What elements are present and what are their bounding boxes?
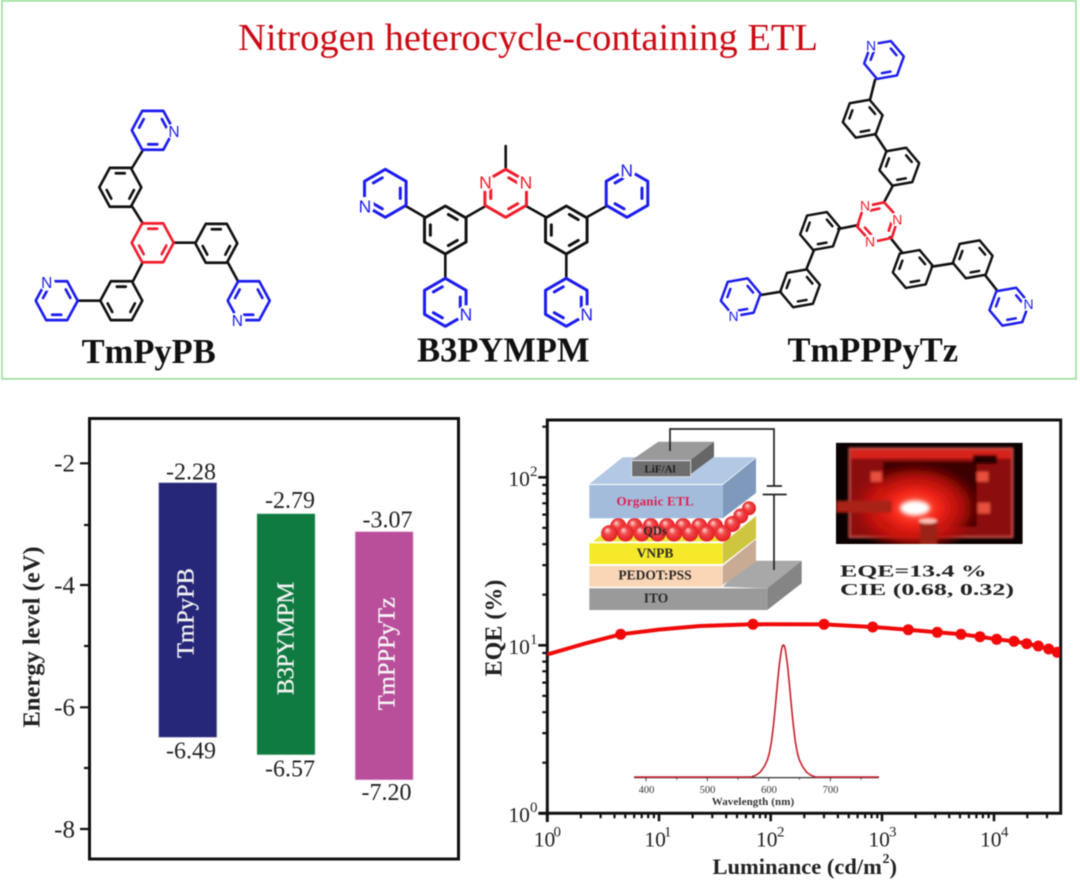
x axis tick labels: 10: [868, 828, 890, 852]
y axis tick labels: -8: [54, 816, 75, 844]
x axis tick labels: 1: [664, 825, 672, 841]
circuit wire and battery: [670, 429, 787, 570]
x axis title: 2: [882, 852, 890, 867]
molecule: B3PYMPM: N: [460, 305, 472, 325]
title: Nitrogen heterocycle-containing ETL: [238, 17, 818, 59]
label: TmPPPyTz: TmPPPyTz: [788, 332, 958, 370]
energy value labels: -6.57: [265, 757, 315, 783]
energy value labels: -3.07: [362, 508, 412, 534]
layer: PEDOT:PSS: [589, 539, 756, 587]
molecule: TmPPPyTz: N: [866, 38, 876, 54]
x axis tick labels: 10: [534, 828, 555, 852]
x axis tick labels: 4: [1001, 825, 1009, 841]
bar: B3PYMPM: [257, 514, 315, 755]
inset: electroluminescence spectrum: [634, 645, 879, 808]
x axis title: Luminance (cd/m: [712, 854, 882, 879]
bar: TmPyPB: TmPyPB: [172, 568, 200, 658]
y axis tick labels: 10: [508, 803, 530, 827]
x axis title: ): [890, 854, 897, 879]
chart: EQE versus luminance: [482, 420, 1063, 879]
molecule: B3PYMPM: N: [580, 305, 593, 325]
molecule: B3PYMPM: N: [359, 196, 371, 216]
bar: TmPPPyTz: TmPPPyTz: [373, 597, 400, 710]
molecule: B3PYMPM: N: [520, 172, 532, 192]
electrode: LiF/Al: [632, 442, 714, 477]
molecule: TmPPPyTz: [714, 33, 1036, 370]
layer: PEDOT:PSS: PEDOT:PSS: [618, 568, 692, 582]
y axis title: EQE (%): [482, 580, 508, 676]
label: B3PYMPM: B3PYMPM: [417, 332, 590, 370]
panel: nitrogen heterocycle ETL molecules: [2, 1, 1076, 379]
layer: VNPB: [589, 516, 756, 564]
molecule: B3PYMPM: N: [479, 172, 492, 192]
x axis tick labels: [534, 825, 1009, 852]
y axis tick labels: 2: [530, 464, 538, 480]
layer: ITO: [589, 561, 802, 610]
x axis tick labels: 10: [980, 828, 1002, 852]
photo: glowing red device: [836, 443, 1023, 554]
electrode: LiF/Al: LiF/Al: [644, 464, 676, 476]
quantum dots layer: [601, 501, 756, 542]
bar: TmPyPB: [158, 482, 217, 738]
x axis tick labels: 2: [777, 825, 784, 841]
energy value labels: -2.28: [166, 459, 216, 485]
x axis tick labels: 0: [554, 825, 561, 841]
callout: device performance: [840, 562, 1014, 599]
y axis tick labels: [54, 450, 75, 844]
label: TmPyPB: TmPyPB: [82, 333, 216, 371]
y axis tick labels: 10: [508, 635, 530, 659]
y axis tick labels: 10: [508, 467, 530, 491]
label: QDs: QDs: [643, 524, 667, 538]
y axis tick labels: -2: [54, 450, 75, 478]
y axis tick labels: 0: [530, 800, 538, 816]
inset: electroluminescence spectrum: 500: [700, 785, 715, 796]
y axis tick labels: -6: [54, 694, 75, 722]
molecule: TmPyPB: [30, 101, 275, 371]
diagram: device structure: [589, 429, 802, 610]
inset: electroluminescence spectrum: 700: [823, 785, 838, 796]
callout: device performance: EQE=13.4 %: [840, 562, 987, 581]
molecule: TmPPPyTz: N: [865, 234, 875, 250]
inset: electroluminescence spectrum: Wavelength (nm): [712, 796, 795, 808]
molecule: TmPyPB: N: [232, 313, 243, 330]
inset: electroluminescence spectrum: 400: [639, 785, 654, 796]
molecule: B3PYMPM: [356, 146, 648, 370]
callout: device performance: CIE (0.68, 0.32): [840, 580, 1014, 599]
inset: electroluminescence spectrum: 600: [761, 785, 777, 796]
y axis tick labels: 1: [530, 632, 538, 648]
layer: organic ETL: [589, 457, 756, 518]
molecule: TmPPPyTz: N: [1023, 296, 1034, 312]
molecule: TmPPPyTz: N: [860, 198, 870, 214]
layer: ITO: ITO: [644, 590, 668, 606]
bar: TmPPPyTz: [355, 532, 413, 780]
energy value labels: -2.79: [265, 488, 315, 514]
y axis tick labels: -4: [54, 572, 75, 600]
energy value labels: [166, 459, 412, 806]
energy value labels: -6.49: [166, 738, 216, 764]
molecule: TmPPPyTz: N: [728, 308, 739, 324]
energy value labels: -7.20: [362, 780, 412, 806]
molecule: TmPyPB: N: [168, 124, 180, 141]
x axis tick labels: 10: [644, 828, 666, 852]
x axis tick labels: 10: [756, 828, 778, 852]
EQE curve with markers: [547, 619, 1063, 658]
layer: VNPB: VNPB: [637, 546, 673, 560]
y axis title: Energy level (eV): [18, 547, 46, 727]
molecule: B3PYMPM: N: [620, 160, 633, 180]
chart: energy level diagram: [18, 418, 458, 859]
bar: B3PYMPM: B3PYMPM: [272, 582, 299, 695]
y axis tick labels: [508, 464, 538, 827]
molecule: TmPPPyTz: N: [892, 211, 902, 227]
x axis tick labels: 3: [889, 825, 896, 841]
layer: organic ETL: Organic ETL: [616, 494, 694, 509]
molecule: TmPyPB: N: [41, 275, 52, 292]
